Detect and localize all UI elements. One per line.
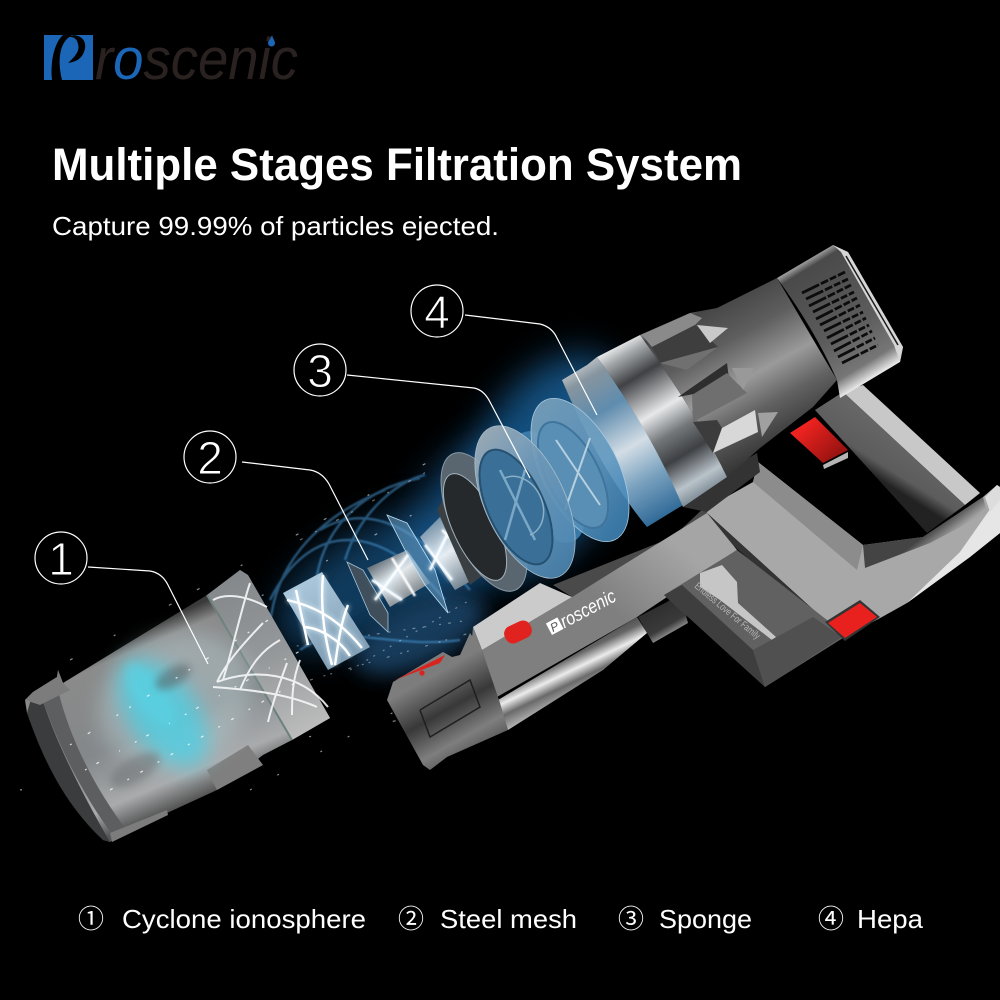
title: Multiple Stages Filtration System bbox=[52, 139, 742, 190]
legend bbox=[78, 904, 924, 934]
body cylinder bbox=[640, 278, 837, 477]
logo: Proscenic: roscenic bbox=[95, 27, 298, 92]
red battery release bbox=[825, 600, 880, 641]
rear end bbox=[777, 245, 903, 398]
filter 2: steel mesh bbox=[283, 515, 487, 670]
legend: ② bbox=[398, 904, 424, 934]
battery: Endless Love For Family bbox=[692, 581, 762, 642]
brand on body bbox=[544, 586, 620, 639]
legend: Cyclone ionosphere bbox=[122, 904, 366, 934]
callout 4: 4 bbox=[424, 286, 450, 338]
callout 1 bbox=[35, 532, 208, 664]
legend: Sponge bbox=[659, 904, 752, 934]
callout 2: 2 bbox=[197, 432, 223, 484]
vent slots bbox=[802, 272, 878, 363]
red button bbox=[502, 618, 534, 646]
callout 3: 3 bbox=[307, 345, 333, 397]
legend: ① bbox=[78, 904, 104, 934]
handle rail bbox=[815, 385, 980, 533]
callout 4 bbox=[411, 285, 597, 415]
red trigger bbox=[790, 417, 848, 469]
filter 3: sponge discs bbox=[423, 383, 649, 603]
metal ring bbox=[597, 335, 727, 507]
filter 1: cyclone ionosphere dust cup bbox=[25, 570, 330, 842]
fins bbox=[642, 313, 702, 347]
tube bbox=[498, 593, 688, 730]
brand on body: P bbox=[548, 619, 561, 635]
handle opening bbox=[757, 432, 927, 546]
legend: ③ bbox=[618, 904, 644, 934]
collar bbox=[562, 357, 683, 527]
battery bbox=[664, 550, 843, 687]
legend: ④ bbox=[818, 904, 844, 934]
motor housing bbox=[562, 245, 903, 527]
dust particles in cup bbox=[70, 600, 320, 790]
mesh swirl lines bbox=[213, 583, 328, 722]
callout 1: 1 bbox=[48, 533, 74, 585]
subtitle: Capture 99.99% of particles ejected. bbox=[52, 211, 499, 241]
brand on body: roscenic bbox=[557, 586, 620, 633]
particles bbox=[20, 450, 490, 790]
main body bbox=[470, 513, 737, 730]
dark band behind body bbox=[553, 505, 715, 597]
lower arm and battery mount bbox=[705, 462, 1000, 638]
blue airflow glow bbox=[255, 326, 663, 692]
nozzle bbox=[387, 633, 508, 770]
callout 2 bbox=[184, 431, 368, 560]
callout 3 bbox=[294, 344, 530, 478]
legend: Steel mesh bbox=[440, 904, 577, 934]
legend: Hepa bbox=[857, 904, 924, 934]
